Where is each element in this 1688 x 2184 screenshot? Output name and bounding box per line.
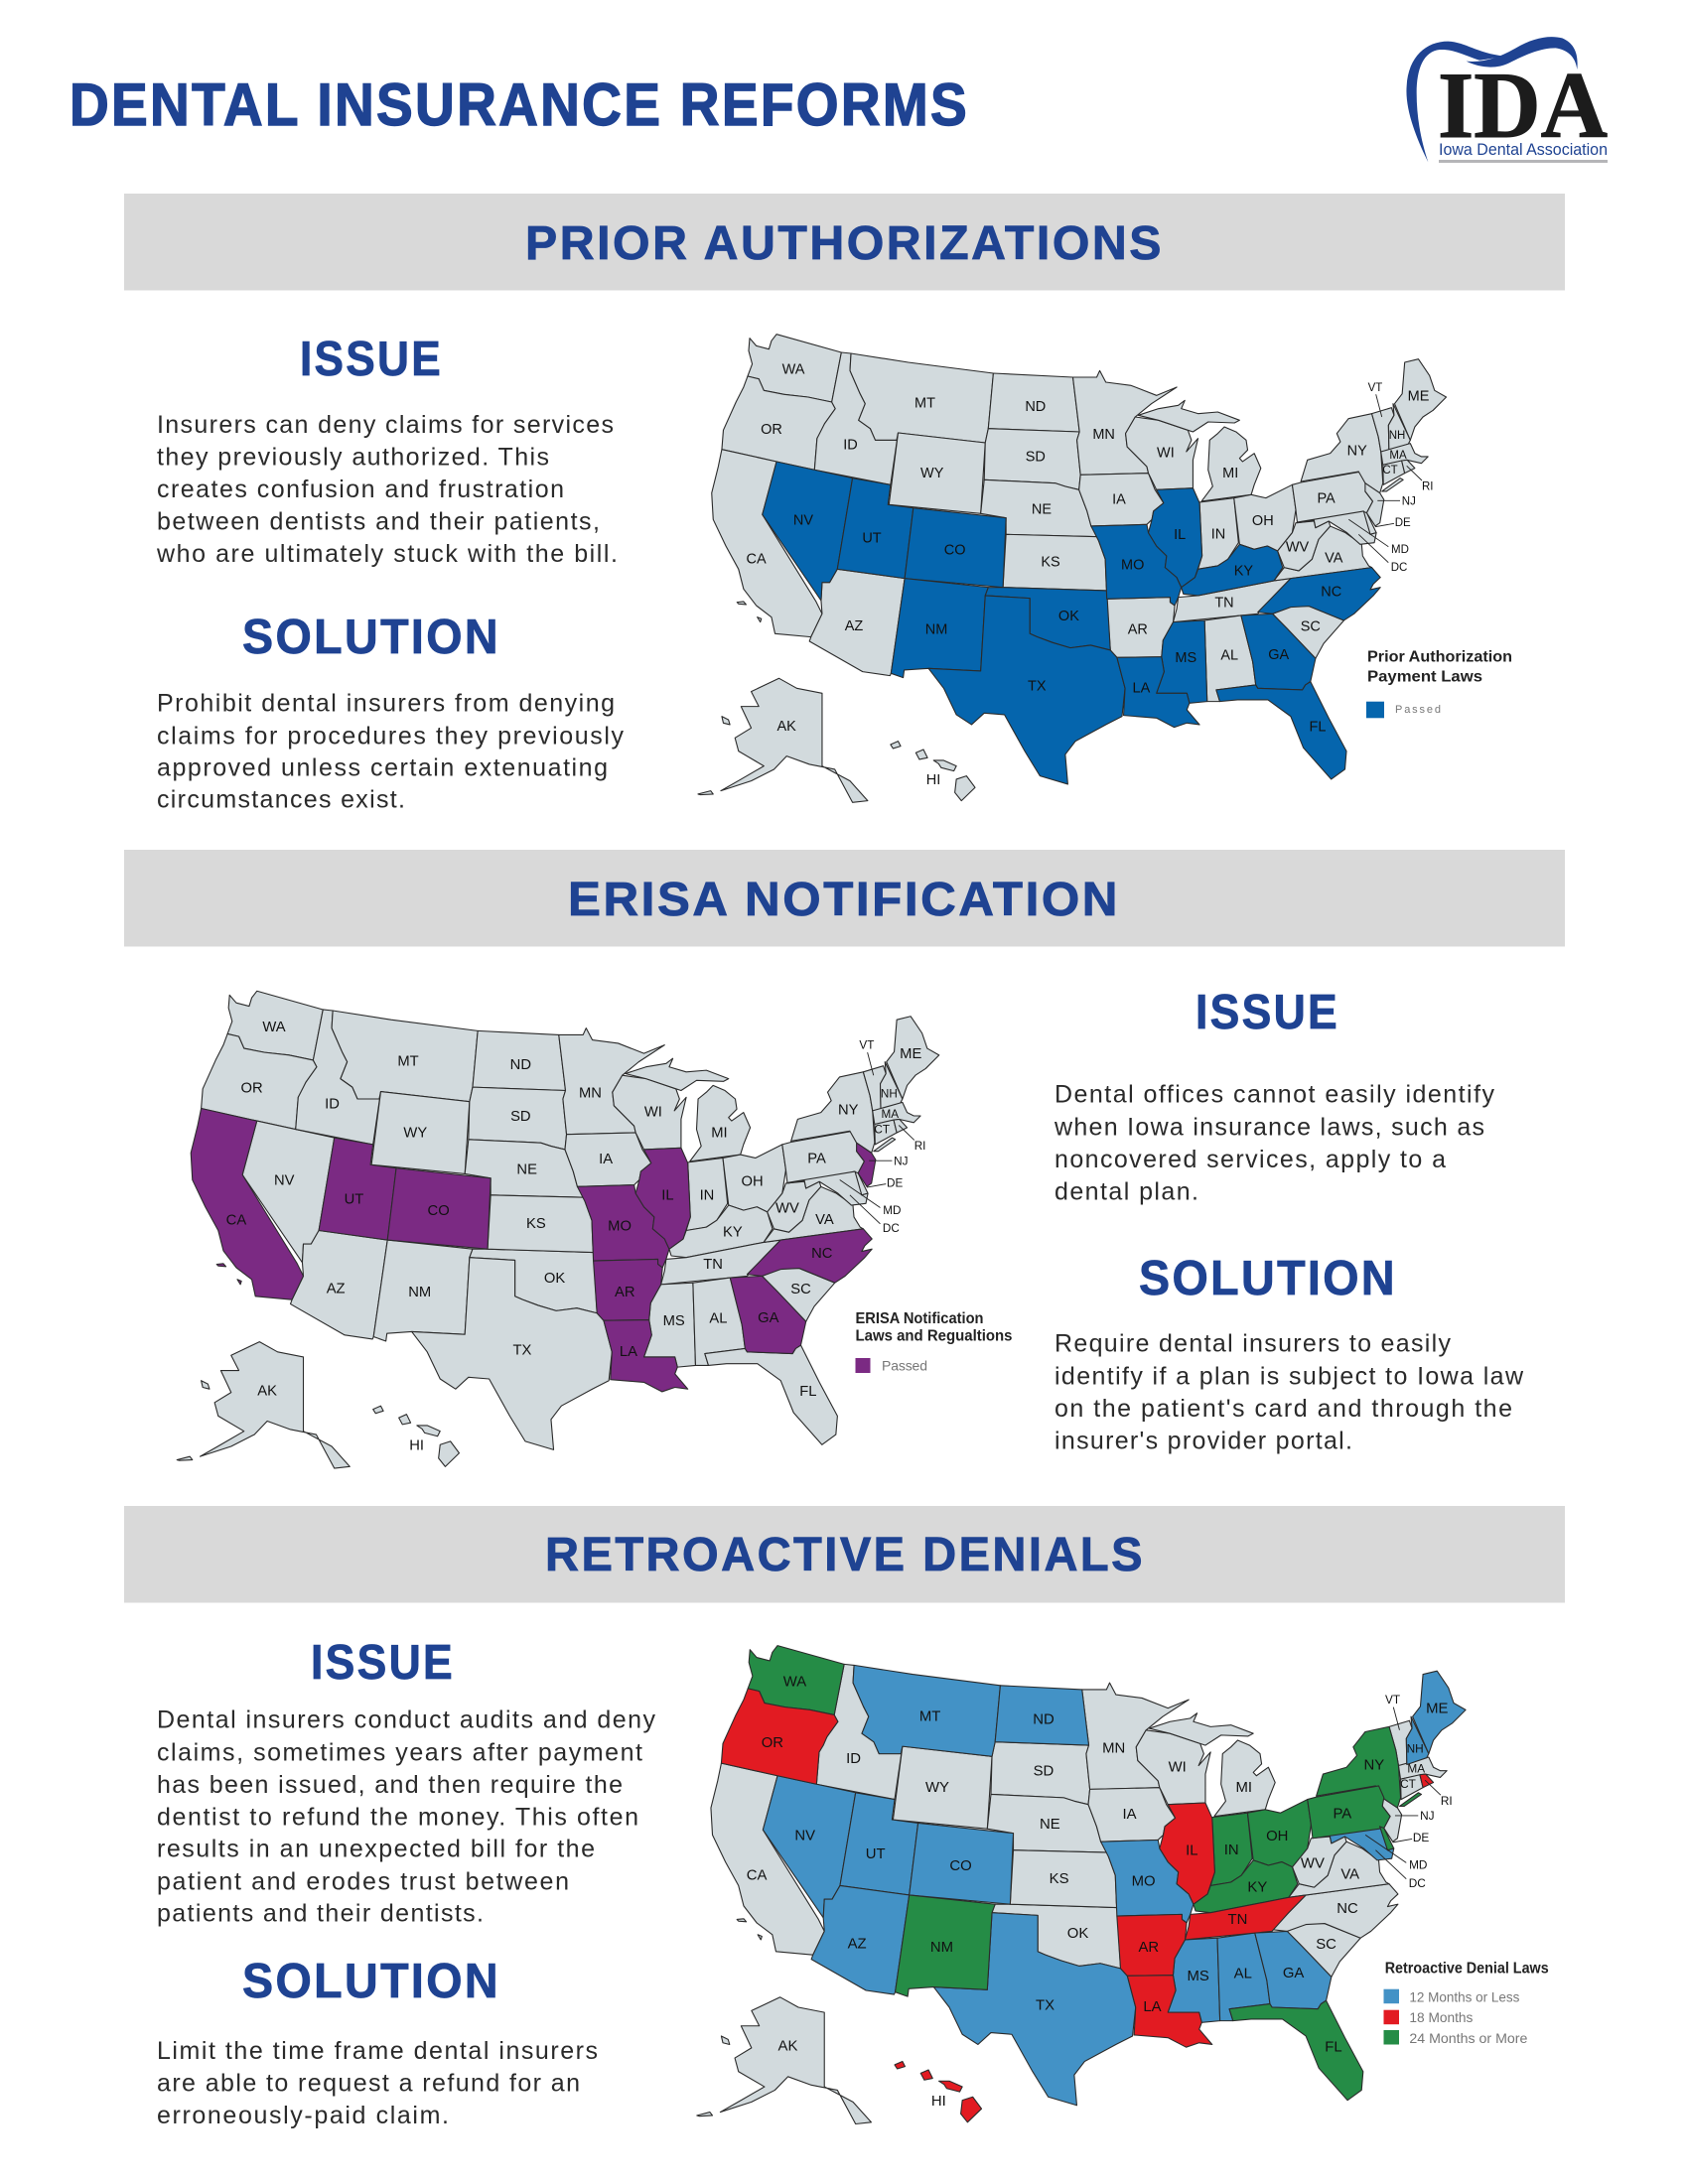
map: erisa notification laws: OR [241, 1081, 263, 1097]
map: prior authorization laws: IN [1211, 527, 1225, 543]
map: erisa notification laws: AR [615, 1285, 635, 1300]
section banner: prior authorizations [124, 194, 1565, 290]
map: prior authorization laws: NM [925, 621, 947, 637]
map: erisa notification laws: OK [544, 1271, 565, 1287]
section banner: retroactive denials [124, 1506, 1565, 1602]
legend: retroactive denial laws [1384, 1960, 1549, 2046]
map: prior authorization laws: TN [1214, 595, 1234, 611]
map: erisa notification laws: TN [703, 1257, 723, 1273]
map: erisa notification laws: MI [711, 1125, 728, 1141]
map: retroactive denial laws: NV [794, 1828, 815, 1843]
map: retroactive denial laws: VT [1385, 1694, 1400, 1706]
legend: retroactive denial laws: 24 Months or More [1409, 2030, 1528, 2046]
map: prior authorization laws: MO [1121, 557, 1144, 573]
map: erisa notification laws: MD [883, 1204, 901, 1217]
map: erisa notification laws: NM [408, 1285, 431, 1300]
map: erisa notification laws: TX [512, 1342, 531, 1358]
map: erisa notification laws: UT [345, 1191, 363, 1207]
map: erisa notification laws: AL [709, 1310, 727, 1326]
legend: prior authorization payment laws: Passed [1395, 704, 1441, 716]
map: retroactive denial laws: MO [1132, 1873, 1156, 1889]
title: DENTAL INSURANCE REFORMS [70, 71, 969, 138]
map: erisa notification laws: CT [874, 1123, 890, 1136]
map: erisa notification laws: SD [510, 1109, 531, 1125]
map: erisa notification laws: SC [790, 1282, 811, 1297]
map: prior authorization laws: RI [1422, 480, 1433, 492]
map: erisa notification laws: AZ [327, 1281, 346, 1297]
map: erisa notification laws: KS [526, 1216, 546, 1232]
text block: erisa issue: when Iowa insurance laws, such as [1054, 1113, 1484, 1141]
map: erisa notification laws: MA [882, 1108, 899, 1121]
legend: erisa notification laws and regulations [856, 1310, 1013, 1374]
map: retroactive denial laws [697, 1646, 1466, 2123]
map: retroactive denial laws: MN [1102, 1740, 1125, 1756]
text block: retroactive denials issue: patients and their dentists. [157, 1900, 484, 1928]
text block: erisa solution: Require dental insurers to easily [1055, 1330, 1452, 1358]
logo: Iowa Dental Association: IDA [1438, 53, 1608, 158]
map: erisa notification laws: RI [914, 1140, 925, 1153]
map: prior authorization laws: CO [944, 542, 965, 558]
map: retroactive denial laws: MA [1407, 1763, 1425, 1776]
map: retroactive denial laws: ND [1033, 1712, 1055, 1728]
map: erisa notification laws: IL [661, 1188, 674, 1204]
text block: erisa issue: dental plan. [1055, 1177, 1198, 1205]
map: retroactive denial laws: AL [1234, 1966, 1252, 1981]
map: retroactive denial laws: MD [1409, 1859, 1427, 1872]
map: erisa notification laws: VT [859, 1039, 874, 1052]
map: erisa notification laws: VA [815, 1212, 834, 1228]
map: prior authorization laws: AL [1220, 647, 1238, 663]
map: retroactive denial laws: DE [1413, 1832, 1429, 1844]
text block: erisa solution: identify if a plan is subject to Iowa law [1055, 1363, 1524, 1391]
legend: retroactive denial laws: Retroactive Denial Laws [1385, 1960, 1549, 1978]
map: erisa notification laws: NE [516, 1161, 537, 1177]
map: erisa notification laws: AK [257, 1383, 277, 1399]
logo: Iowa Dental Association: Iowa Dental Association [1439, 140, 1608, 159]
map: prior authorization laws: ME [1408, 388, 1430, 404]
map: erisa notification laws: IA [599, 1152, 613, 1167]
map: prior authorization laws: VT [1368, 382, 1382, 394]
map: erisa notification laws: FL [799, 1384, 816, 1400]
map: prior authorization laws: NE [1032, 501, 1052, 517]
map: retroactive denial laws: OK [1067, 1926, 1088, 1942]
map: prior authorization laws: MN [1092, 427, 1115, 443]
map: erisa notification laws: NY [838, 1103, 859, 1119]
map: prior authorization laws: MT [914, 396, 935, 412]
map: prior authorization laws: AR [1128, 621, 1148, 637]
map: prior authorization laws: CA [747, 551, 767, 567]
map: prior authorization laws: VA [1325, 551, 1343, 567]
map: prior authorization laws: MS [1175, 650, 1196, 666]
map: erisa notification laws: NC [811, 1246, 833, 1262]
text block: retroactive denials solution: SOLUTION [242, 1955, 500, 2008]
map: prior authorization laws: ND [1025, 399, 1046, 415]
map: prior authorization laws: MD [1391, 544, 1409, 556]
map: retroactive denial laws: SC [1316, 1937, 1336, 1953]
text block: erisa solution: SOLUTION [1139, 1252, 1397, 1305]
map: retroactive denial laws: NE [1040, 1817, 1060, 1833]
text block: retroactive denials issue: has been issued, and then require the [157, 1771, 623, 1799]
text block: prior authorizations solution: Prohibit dental insurers from denying [157, 690, 615, 718]
map: erisa notification laws: NH [881, 1088, 898, 1101]
map: erisa notification laws: IN [700, 1187, 714, 1203]
map: prior authorization laws: NC [1321, 584, 1341, 600]
map: erisa notification laws: WA [262, 1020, 286, 1035]
legend: erisa notification laws and regulations: Laws and Regualtions [856, 1328, 1013, 1345]
map: prior authorization laws: AZ [845, 618, 863, 634]
map: erisa notification laws: WI [644, 1105, 662, 1121]
map: erisa notification laws: HI [409, 1437, 424, 1453]
section banner: erisa notification [124, 850, 1565, 947]
map: retroactive denial laws: CT [1400, 1778, 1416, 1791]
map: retroactive denial laws: IL [1186, 1843, 1198, 1858]
map: prior authorization laws: NY [1347, 444, 1367, 460]
map: erisa notification laws: DE [887, 1176, 903, 1189]
map: prior authorization laws: OR [761, 422, 782, 438]
map: erisa notification laws: GA [758, 1310, 779, 1326]
map: retroactive denial laws: NM [930, 1940, 953, 1956]
map: erisa notification laws [177, 991, 939, 1468]
map: erisa notification laws: MN [579, 1086, 602, 1102]
map: retroactive denial laws: WV [1301, 1855, 1325, 1871]
text block: prior authorizations issue: Insurers can deny claims for services [157, 411, 614, 439]
text block: retroactive denials issue: claims, sometimes years after payment [157, 1738, 642, 1766]
text block: retroactive denials issue: dentist to refund the money. This often [157, 1803, 638, 1831]
map: erisa notification laws: NJ [894, 1155, 908, 1167]
map: prior authorization laws: WY [920, 466, 944, 481]
legend: erisa notification laws and regulations: ERISA Notification [856, 1310, 983, 1327]
map: retroactive denial laws: OR [762, 1735, 783, 1751]
legend: retroactive denial laws: 12 Months or Less [1409, 1989, 1519, 2005]
text block: retroactive denials solution [157, 1955, 598, 2129]
text block: retroactive denials solution: erroneously-paid claim. [157, 2102, 449, 2129]
legend: prior authorization payment laws: Payment Laws [1367, 669, 1482, 686]
map: retroactive denial laws: WY [925, 1780, 949, 1796]
map: prior authorization laws: FL [1310, 720, 1326, 736]
text block: prior authorizations issue: creates confusion and frustration [157, 476, 564, 503]
map: retroactive denial laws: OH [1266, 1829, 1288, 1844]
map: prior authorization laws: SD [1026, 450, 1046, 466]
text block: erisa issue: ISSUE [1196, 986, 1339, 1039]
map: erisa notification laws: PA [807, 1152, 826, 1167]
text block: erisa issue [1054, 986, 1495, 1205]
text block: prior authorizations solution: approved unless certain extenuating [157, 754, 608, 782]
text block: erisa issue: noncovered services, apply to a [1055, 1146, 1446, 1173]
text block: retroactive denials issue: patient and erodes trust between [157, 1867, 569, 1895]
map: retroactive denial laws: CA [747, 1867, 767, 1883]
section banner: retroactive denials: RETROACTIVE DENIALS [545, 1529, 1145, 1581]
map: erisa notification laws: LA [620, 1344, 637, 1360]
text block: prior authorizations issue [156, 333, 618, 568]
map: prior authorization laws: IL [1174, 527, 1186, 543]
map: prior authorization laws: WA [782, 362, 805, 378]
map: retroactive denial laws: SD [1034, 1763, 1055, 1779]
text block: retroactive denials issue [157, 1636, 655, 1928]
map: prior authorization laws: SC [1301, 619, 1321, 635]
map: retroactive denial laws: HI [931, 2094, 946, 2110]
text block: erisa solution [1055, 1252, 1524, 1454]
map: retroactive denial laws: CO [949, 1858, 972, 1874]
map: prior authorization laws: NJ [1402, 496, 1416, 508]
map: prior authorization laws: PA [1317, 491, 1336, 507]
map: prior authorization laws: KY [1234, 563, 1253, 579]
map: retroactive denial laws: UT [866, 1846, 886, 1862]
logo: Iowa Dental Association [1406, 37, 1608, 163]
map: retroactive denial laws: NJ [1420, 1810, 1435, 1823]
text block: prior authorizations issue: they previously authorized. This [157, 444, 549, 472]
map: retroactive denial laws: TN [1227, 1912, 1247, 1928]
legend: erisa notification laws and regulations: Passed [882, 1358, 927, 1374]
text block: prior authorizations issue: between dentists and their patients, [157, 508, 600, 536]
map: erisa notification laws: KY [723, 1225, 743, 1241]
text block: prior authorizations issue: ISSUE [300, 333, 443, 386]
map: retroactive denial laws: PA [1333, 1806, 1351, 1822]
map: retroactive denial laws: MT [919, 1708, 940, 1724]
text block: retroactive denials issue: results in an unexpected bill for the [157, 1836, 595, 1863]
map: erisa notification laws: DC [883, 1222, 900, 1235]
map: erisa notification laws: ME [900, 1046, 921, 1062]
map: prior authorization laws: UT [862, 531, 882, 547]
map: erisa notification laws: CO [428, 1203, 450, 1219]
legend: prior authorization payment laws [1366, 649, 1512, 718]
map: retroactive denial laws: DC [1409, 1877, 1426, 1890]
map: retroactive denial laws: ID [846, 1751, 861, 1767]
legend: retroactive denial laws: 18 Months [1409, 2009, 1473, 2025]
map: retroactive denial laws: WI [1169, 1759, 1187, 1775]
map: retroactive denial laws: MS [1187, 1969, 1209, 1984]
map: erisa notification laws: WV [775, 1201, 799, 1217]
map: erisa notification laws: CA [226, 1212, 246, 1228]
map: retroactive denial laws: NH [1407, 1742, 1424, 1755]
map: erisa notification laws: ND [510, 1057, 531, 1073]
map: prior authorization laws: WI [1157, 446, 1175, 462]
map: retroactive denial laws: VA [1340, 1867, 1359, 1883]
map: prior authorization laws: WV [1286, 540, 1310, 556]
map: retroactive denial laws: KS [1050, 1871, 1069, 1887]
map: prior authorization laws: TX [1028, 679, 1047, 695]
text block: prior authorizations issue: who are ultimately stuck with the bill. [156, 540, 618, 568]
text block: prior authorizations solution [157, 611, 624, 813]
map: retroactive denial laws: WA [783, 1675, 806, 1691]
map: erisa notification laws: OH [742, 1173, 764, 1189]
map: prior authorization laws: MA [1389, 450, 1407, 462]
map: prior authorization laws: LA [1133, 680, 1151, 696]
map: prior authorization laws: CT [1382, 465, 1398, 477]
map: prior authorization laws: KS [1041, 555, 1060, 571]
map: prior authorization laws: OH [1252, 513, 1274, 529]
map: prior authorization laws: DC [1391, 562, 1407, 574]
map: erisa notification laws: MS [663, 1313, 685, 1329]
map: prior authorization laws: DE [1395, 517, 1411, 529]
map: prior authorization laws: IA [1112, 491, 1126, 507]
text block: erisa solution: on the patient's card and through the [1055, 1395, 1512, 1423]
map: retroactive denial laws: MI [1236, 1780, 1252, 1796]
map: prior authorization laws: MI [1222, 466, 1238, 481]
map: retroactive denial laws: NC [1336, 1901, 1358, 1917]
text block: erisa issue: Dental offices cannot easily identify [1055, 1081, 1495, 1109]
text block: erisa solution: insurer's provider portal. [1055, 1427, 1352, 1454]
text block: retroactive denials issue: Dental insurers conduct audits and deny [157, 1706, 655, 1734]
map: prior authorization laws: NV [793, 512, 813, 528]
map: retroactive denial laws: IA [1122, 1807, 1137, 1823]
map: retroactive denial laws: NY [1363, 1757, 1384, 1773]
section banner: prior authorizations: PRIOR AUTHORIZATIONS [525, 217, 1164, 270]
text block: prior authorizations solution: SOLUTION [242, 611, 500, 664]
map: prior authorization laws: AK [777, 719, 796, 735]
map: retroactive denial laws: TX [1036, 1998, 1055, 2013]
map: retroactive denial laws: AR [1138, 1940, 1159, 1956]
map: prior authorization laws: NH [1389, 430, 1405, 442]
text block: retroactive denials issue: ISSUE [311, 1636, 455, 1690]
map: retroactive denial laws: AK [778, 2039, 798, 2055]
map: retroactive denial laws: IN [1224, 1843, 1239, 1858]
map: erisa notification laws: MO [608, 1219, 632, 1235]
map: retroactive denial laws: LA [1143, 1999, 1162, 2015]
legend: prior authorization payment laws: Prior Authorization [1367, 649, 1512, 666]
map: retroactive denial laws: KY [1247, 1880, 1267, 1896]
text block: prior authorizations solution: claims for procedures they previously [157, 722, 624, 750]
map: prior authorization laws: ID [843, 438, 858, 454]
text block: retroactive denials solution: Limit the time frame dental insurers [157, 2037, 598, 2065]
text block: retroactive denials solution: are able to request a refund for an [157, 2070, 580, 2098]
map: retroactive denial laws: AZ [848, 1936, 867, 1952]
map: erisa notification laws: WY [403, 1125, 427, 1141]
map: retroactive denial laws: RI [1441, 1795, 1453, 1808]
section banner: erisa notification: ERISA NOTIFICATION [568, 874, 1120, 926]
map: retroactive denial laws: GA [1283, 1966, 1304, 1981]
map: prior authorization laws: GA [1268, 647, 1290, 663]
map: erisa notification laws: NV [274, 1173, 295, 1189]
map: retroactive denial laws: FL [1325, 2039, 1342, 2055]
map: erisa notification laws: MT [397, 1054, 419, 1070]
map: prior authorization laws: HI [926, 772, 940, 788]
map: erisa notification laws: ID [325, 1097, 340, 1113]
map: prior authorization laws: OK [1058, 609, 1079, 624]
text block: prior authorizations solution: circumstances exist. [157, 785, 405, 813]
map: retroactive denial laws: ME [1426, 1702, 1449, 1717]
map: prior authorization laws [698, 335, 1447, 802]
